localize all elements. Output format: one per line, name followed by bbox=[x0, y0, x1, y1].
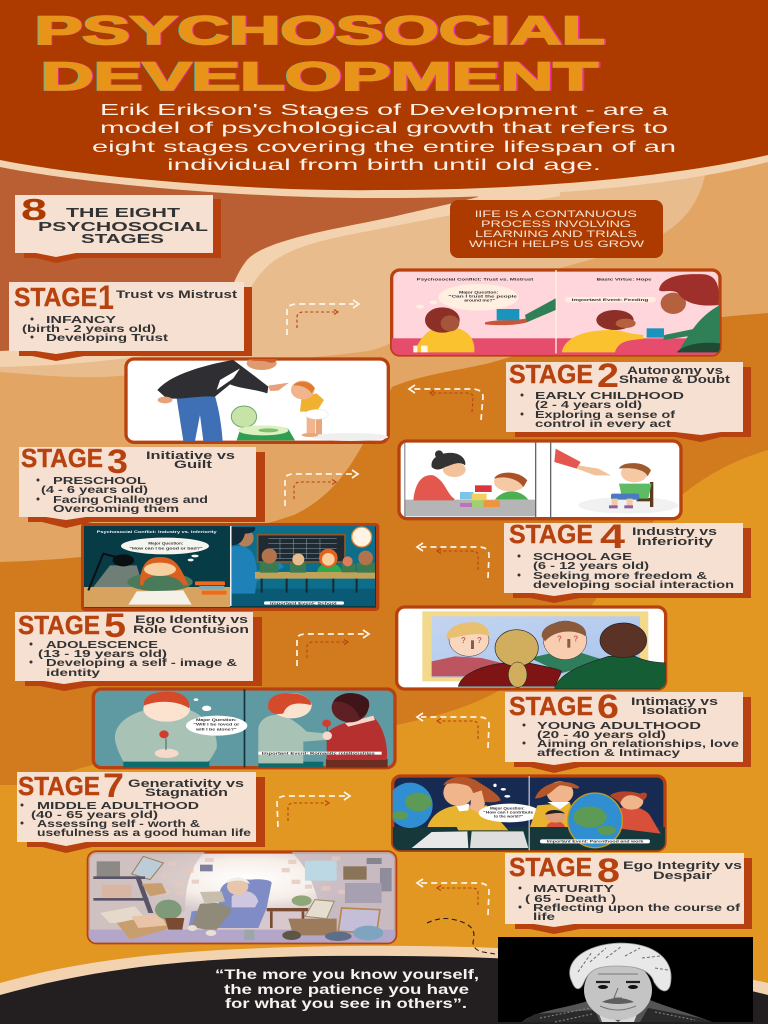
title: DEVELOPMENT bbox=[42, 55, 600, 99]
quote bbox=[215, 966, 479, 1011]
panel: stage 8: Despair bbox=[653, 870, 713, 882]
picture: stage 7 generativity vs stagnation: to the world?” bbox=[494, 813, 523, 818]
picture: stage 7 generativity vs stagnation: Important Event: Parenthood and work bbox=[547, 839, 644, 844]
panel: stage 7: Assessing self - worth & bbox=[37, 819, 201, 830]
picture: stage 4 industry vs inferiority bbox=[83, 525, 378, 609]
panel: the eight psychosocial stages: THE EIGHT bbox=[66, 206, 181, 220]
panel: stage 6: STAGE bbox=[509, 691, 593, 721]
panel: stage 1: 1 bbox=[98, 279, 114, 317]
panel: stage 4 bbox=[504, 518, 751, 603]
panel: stage 7: Generativity vs bbox=[128, 778, 244, 790]
picture: stage 2 autonomy vs shame bbox=[126, 357, 388, 442]
panel: stage 8: ( 65 - Death ) bbox=[525, 894, 616, 905]
panel: stage 5: ADOLESCENCE bbox=[46, 640, 158, 651]
panel: stage 7: 7 bbox=[103, 767, 124, 805]
panel: stage 4: Inferiority bbox=[637, 536, 713, 548]
callout: life is a continuous process: lIFE IS A CONTANUOUS bbox=[475, 209, 637, 219]
picture: stage 6 intimacy vs isolation bbox=[93, 689, 395, 768]
panel: stage 5: Role Confusion bbox=[133, 624, 249, 636]
arrow: stage 4 to picture bbox=[417, 543, 489, 578]
panel: stage 1: (birth - 2 years old) bbox=[22, 324, 156, 335]
arrow: dark dashed curve to portrait bbox=[427, 918, 495, 954]
title: DEVELOPMENT bbox=[41, 55, 598, 99]
panel: stage 2: control in every act bbox=[535, 419, 672, 430]
title bbox=[34, 9, 607, 99]
panel: stage 6: (20 - 40 years old) bbox=[537, 730, 666, 741]
picture: stage 5 identity vs role confusion: ? bbox=[477, 636, 482, 645]
panel: stage 2 bbox=[506, 357, 751, 442]
title: DEVELOPMENT bbox=[40, 55, 598, 99]
header band bbox=[0, 0, 768, 190]
picture: stage 6 intimacy vs isolation: will I be alone?” bbox=[195, 726, 237, 731]
callout: life is a continuous process: LEARNING AND TRIALS bbox=[475, 229, 637, 239]
picture: stage 3 initiative vs guilt bbox=[399, 441, 681, 519]
panel: stage 5: (13 - 19 years old) bbox=[38, 649, 167, 660]
panel: the eight psychosocial stages: STAGES bbox=[81, 232, 164, 246]
arrow: stage 7 to picture bbox=[277, 792, 350, 827]
panel: stage 6: YOUNG ADULTHOOD bbox=[537, 721, 702, 732]
picture: stage 6 intimacy vs isolation: Important Event: Romantic relationships bbox=[262, 750, 376, 755]
panel: stage 8: STAGE bbox=[509, 852, 592, 882]
callout: life is a continuous process: PROCESS INVOLVING bbox=[481, 219, 631, 229]
arrow: stage 1 to picture bbox=[287, 300, 359, 335]
panel: stage 4: Industry vs bbox=[632, 526, 717, 538]
picture: stage 5 identity vs role confusion bbox=[397, 607, 666, 689]
intro text: individual from birth until old age. bbox=[167, 157, 601, 174]
panel: stage 2: Exploring a sense of bbox=[535, 410, 676, 421]
panel: stage 3: Initiative vs bbox=[146, 450, 235, 462]
picture: stage 7 generativity vs stagnation: Major Question: bbox=[490, 805, 525, 810]
panel: stage 8: Ego Integrity vs bbox=[623, 860, 742, 872]
panel: stage 8: 8 bbox=[597, 852, 620, 890]
picture: stage 1 trust vs mistrust: Psychosocial Conflict: Trust vs. Mistrust bbox=[417, 276, 534, 281]
panel: stage 7 bbox=[17, 767, 265, 853]
panel: stage 1 bbox=[9, 279, 252, 361]
panel: stage 6 bbox=[505, 688, 751, 773]
panel: stage 8 bbox=[505, 852, 752, 934]
panel: stage 6: Intimacy vs bbox=[631, 696, 718, 708]
panel: stage 5 bbox=[15, 607, 262, 691]
callout: life is a continuous process: WHICH HELPS US GROW bbox=[469, 239, 645, 249]
title: PSYCHOSOCIAL bbox=[34, 9, 605, 53]
intro text: model of psychological growth that refers to bbox=[100, 120, 668, 137]
picture: stage 7 generativity vs stagnation bbox=[387, 776, 665, 850]
panel: stage 8: MATURITY bbox=[533, 884, 614, 895]
panel: stage 3: PRESCHOOL bbox=[53, 476, 147, 487]
panel: stage 3: 3 bbox=[107, 443, 128, 481]
panel: stage 6: Aiming on relationships, love bbox=[537, 739, 739, 750]
panel: stage 5: STAGE bbox=[18, 610, 100, 640]
panel: stage 3: Guilt bbox=[174, 459, 213, 471]
panel: stage 2: EARLY CHILDHOOD bbox=[535, 391, 685, 402]
picture: stage 4 industry vs inferiority: “How can I be good or bad?” bbox=[129, 545, 203, 550]
panel: stage 5: identity bbox=[46, 668, 100, 679]
panel: stage 4: developing social interaction bbox=[533, 580, 734, 591]
picture: stage 8 ego integrity vs despair bbox=[88, 852, 396, 943]
panel: the eight psychosocial stages bbox=[15, 192, 221, 263]
quote: “The more you know yourself, bbox=[215, 966, 479, 982]
panel: stage 2: Shame & Doubt bbox=[619, 374, 731, 386]
panel: stage 2: STAGE bbox=[509, 359, 593, 389]
panel: stage 4: STAGE bbox=[509, 519, 593, 549]
panel: stage 7: Stagnation bbox=[145, 787, 228, 799]
intro text bbox=[92, 102, 676, 174]
panel: stage 7: usefulness as a good human life bbox=[37, 828, 251, 839]
arrow: stage 3 to picture bbox=[285, 470, 358, 506]
panel: stage 1: Developing Trust bbox=[46, 333, 169, 344]
title: PSYCHOSOCIAL bbox=[36, 9, 607, 53]
panel: stage 8: life bbox=[533, 912, 555, 923]
panel: stage 8: Reflecting upon the course of bbox=[533, 903, 741, 914]
panel: stage 4: (6 - 12 years old) bbox=[533, 561, 649, 572]
panel: stage 7: (40 - 65 years old) bbox=[31, 810, 158, 821]
picture: stage 6 intimacy vs isolation: Major Question: bbox=[196, 717, 237, 722]
arrow: stage 2 to picture bbox=[409, 385, 483, 420]
panel: the eight psychosocial stages: PSYCHOSOCIAL bbox=[38, 220, 209, 234]
panel: the eight psychosocial stages: 8 bbox=[21, 192, 47, 227]
picture: stage 1 trust vs mistrust: “Can I trust the people bbox=[448, 294, 518, 299]
arrow: stage 5 to picture bbox=[297, 630, 369, 666]
picture: stage 4 industry vs inferiority: Major Question: bbox=[148, 541, 183, 546]
footer band bbox=[0, 956, 768, 1024]
picture: stage 1 trust vs mistrust: Important Event: Feeding bbox=[572, 297, 649, 302]
quote: the more patience you have bbox=[224, 981, 469, 997]
panel: stage 4: Seeking more freedom & bbox=[533, 571, 708, 582]
panel: stage 3: Overcoming them bbox=[53, 504, 179, 515]
panel: stage 6: affection & Intimacy bbox=[537, 748, 680, 759]
panel: stage 6: 6 bbox=[597, 688, 619, 726]
arrow: stage 8 to picture bbox=[417, 879, 489, 915]
picture: stage 4 industry vs inferiority: Important Event: School bbox=[270, 600, 337, 605]
picture: stage 1 trust vs mistrust: Basic Virtue: Hope bbox=[597, 276, 653, 281]
panel: stage 5: 5 bbox=[104, 607, 126, 645]
picture: stage 5 identity vs role confusion: ? bbox=[461, 636, 466, 645]
picture: stage 5 identity vs role confusion: ? bbox=[557, 635, 562, 644]
panel: stage 5: Developing a self - image & bbox=[46, 658, 238, 669]
picture: stage 7 generativity vs stagnation: “How can I contribute bbox=[483, 809, 534, 814]
panel: stage 1: INFANCY bbox=[46, 315, 116, 326]
intro text: Erik Erikson's Stages of Development - are a bbox=[100, 102, 668, 119]
panel: stage 2: 2 bbox=[597, 357, 619, 395]
panel: stage 3 bbox=[19, 443, 265, 528]
panel: stage 4: 4 bbox=[600, 518, 625, 556]
quote: for what you see in others”. bbox=[225, 995, 467, 1011]
picture: stage 6 intimacy vs isolation: “Will I be loved or bbox=[193, 722, 240, 727]
picture: stage 5 identity vs role confusion: ? bbox=[573, 635, 578, 644]
title: PSYCHOSOCIAL bbox=[35, 9, 605, 53]
panel: stage 6: Isolation bbox=[642, 705, 707, 717]
picture: stage 1 trust vs mistrust: around me?” bbox=[464, 298, 495, 303]
arrow: stage 6 to picture bbox=[417, 713, 489, 748]
intro text: eight stages covering the entire lifespan of an bbox=[92, 139, 676, 156]
portrait: Erik Erikson bbox=[498, 937, 753, 1022]
panel: stage 2: (2 - 4 years old) bbox=[535, 400, 642, 411]
panel: stage 1: Trust vs Mistrust bbox=[116, 289, 238, 301]
panel: stage 4: SCHOOL AGE bbox=[533, 552, 632, 563]
panel: stage 3: Facing Challenges and bbox=[53, 495, 208, 506]
panel: stage 7: STAGE bbox=[18, 771, 100, 801]
panel: stage 3: (4 - 6 years old) bbox=[41, 485, 148, 496]
callout: life is a continuous process bbox=[450, 200, 663, 258]
panel: stage 2: Autonomy vs bbox=[627, 365, 723, 377]
picture: stage 4 industry vs inferiority: Psychosocial Conflict: Industry vs. Inferiority bbox=[97, 529, 218, 534]
panel: stage 5: Ego Identity vs bbox=[135, 614, 248, 626]
picture: stage 1 trust vs mistrust bbox=[392, 270, 720, 355]
picture: stage 1 trust vs mistrust: Major Question: bbox=[459, 290, 498, 295]
panel: stage 7: MIDDLE ADULTHOOD bbox=[37, 801, 200, 812]
panel: stage 1: STAGE bbox=[14, 282, 97, 312]
panel: stage 3: STAGE bbox=[21, 443, 103, 473]
